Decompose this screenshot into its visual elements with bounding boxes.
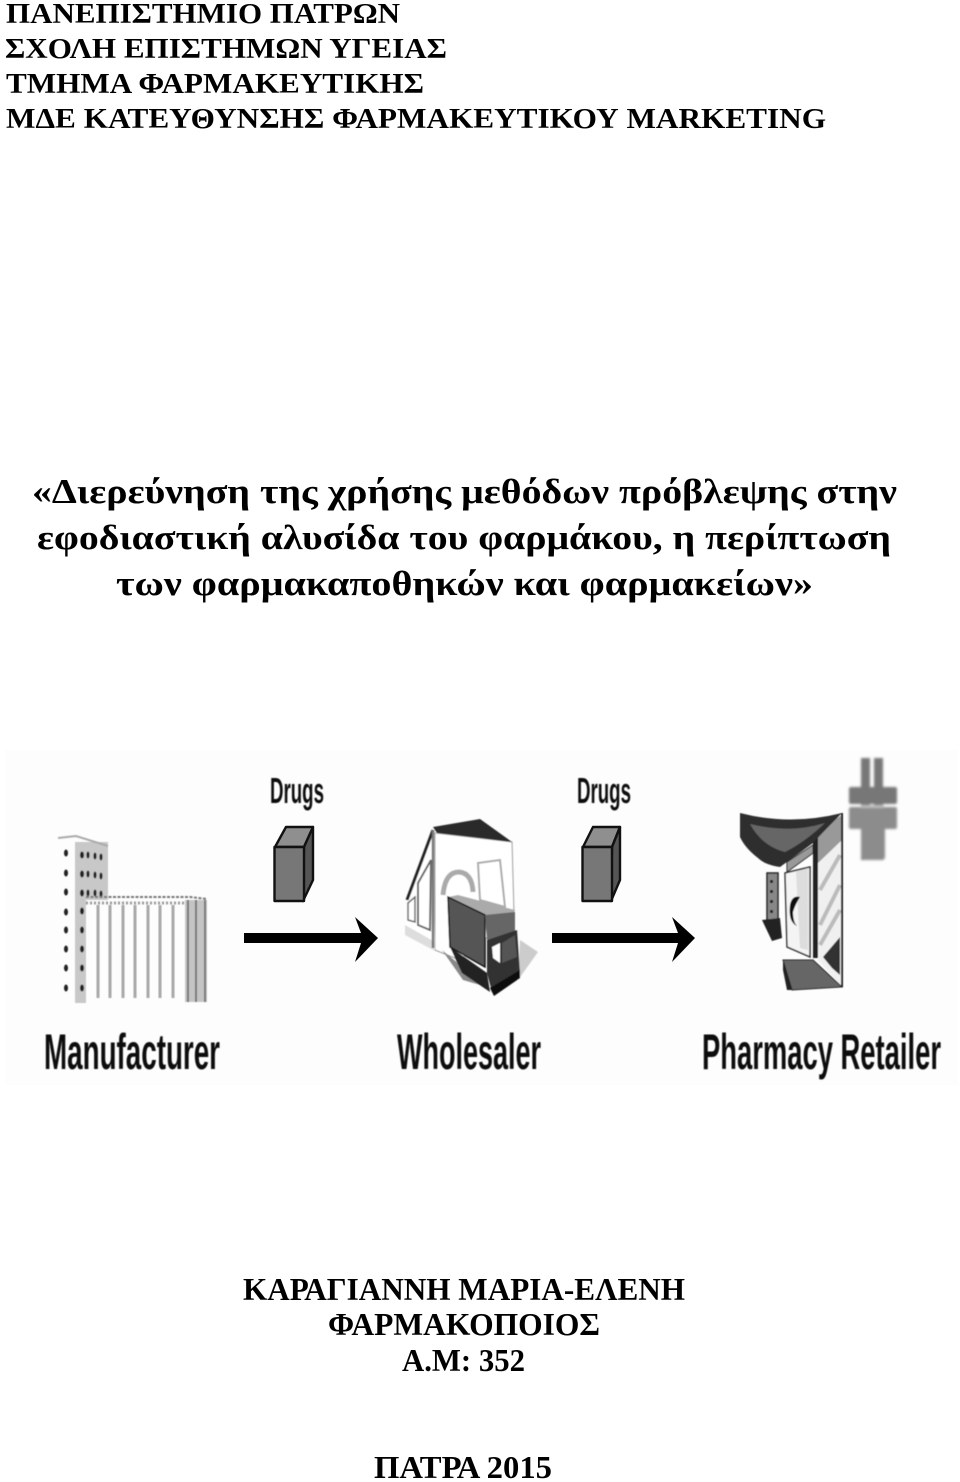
icon: drugs box 2 bbox=[582, 827, 620, 901]
header: institution lines: ΜΔΕ ΚΑΤΕΥΘΥΝΣΗΣ ΦΑΡΜΑΚΕΥΤΙΚΟΥ MARKETING bbox=[6, 103, 826, 135]
author block: Α.Μ: 352 bbox=[402, 1342, 525, 1378]
supply chain diagram bbox=[5, 750, 958, 1085]
arrow: manufacturer to wholesaler bbox=[244, 917, 378, 962]
icon: pharmacy storefront bbox=[740, 813, 842, 990]
header: institution lines: ΣΧΟΛΗ ΕΠΙΣΤΗΜΩΝ ΥΓΕΙΑΣ bbox=[5, 33, 447, 65]
thesis title: εφοδιαστική αλυσίδα του φαρμάκου, η περίπτωση bbox=[37, 518, 891, 557]
thesis title: των φαρμακαποθηκών και φαρμακείων» bbox=[116, 564, 813, 603]
label: Wholesaler: Wholesaler bbox=[397, 1024, 541, 1080]
icon: wholesaler warehouse and truck bbox=[405, 819, 538, 996]
header: institution lines bbox=[5, 0, 826, 135]
label: Manufacturer: Manufacturer bbox=[44, 1024, 220, 1080]
thesis title bbox=[32, 472, 897, 603]
author block: ΦΑΡΜΑΚΟΠΟΙΟΣ bbox=[328, 1306, 600, 1342]
thesis title: «Διερεύνηση της χρήσης μεθόδων πρόβλεψης στην bbox=[32, 472, 897, 511]
author block bbox=[243, 1271, 685, 1378]
arrow: wholesaler to pharmacy bbox=[552, 917, 695, 962]
label: Drugs 1: Drugs bbox=[270, 770, 324, 811]
icon: pharmacy cross bbox=[849, 758, 897, 860]
icon: drugs box 1 bbox=[274, 827, 313, 901]
author block: ΚΑΡΑΓΙΑΝΝΗ ΜΑΡΙΑ-ΕΛΕΝΗ bbox=[243, 1271, 685, 1307]
label: Drugs 2: Drugs bbox=[577, 770, 631, 811]
header: institution lines: ΤΜΗΜΑ ΦΑΡΜΑΚΕΥΤΙΚΗΣ bbox=[6, 68, 424, 100]
icon: manufacturer factory bbox=[58, 836, 207, 1003]
